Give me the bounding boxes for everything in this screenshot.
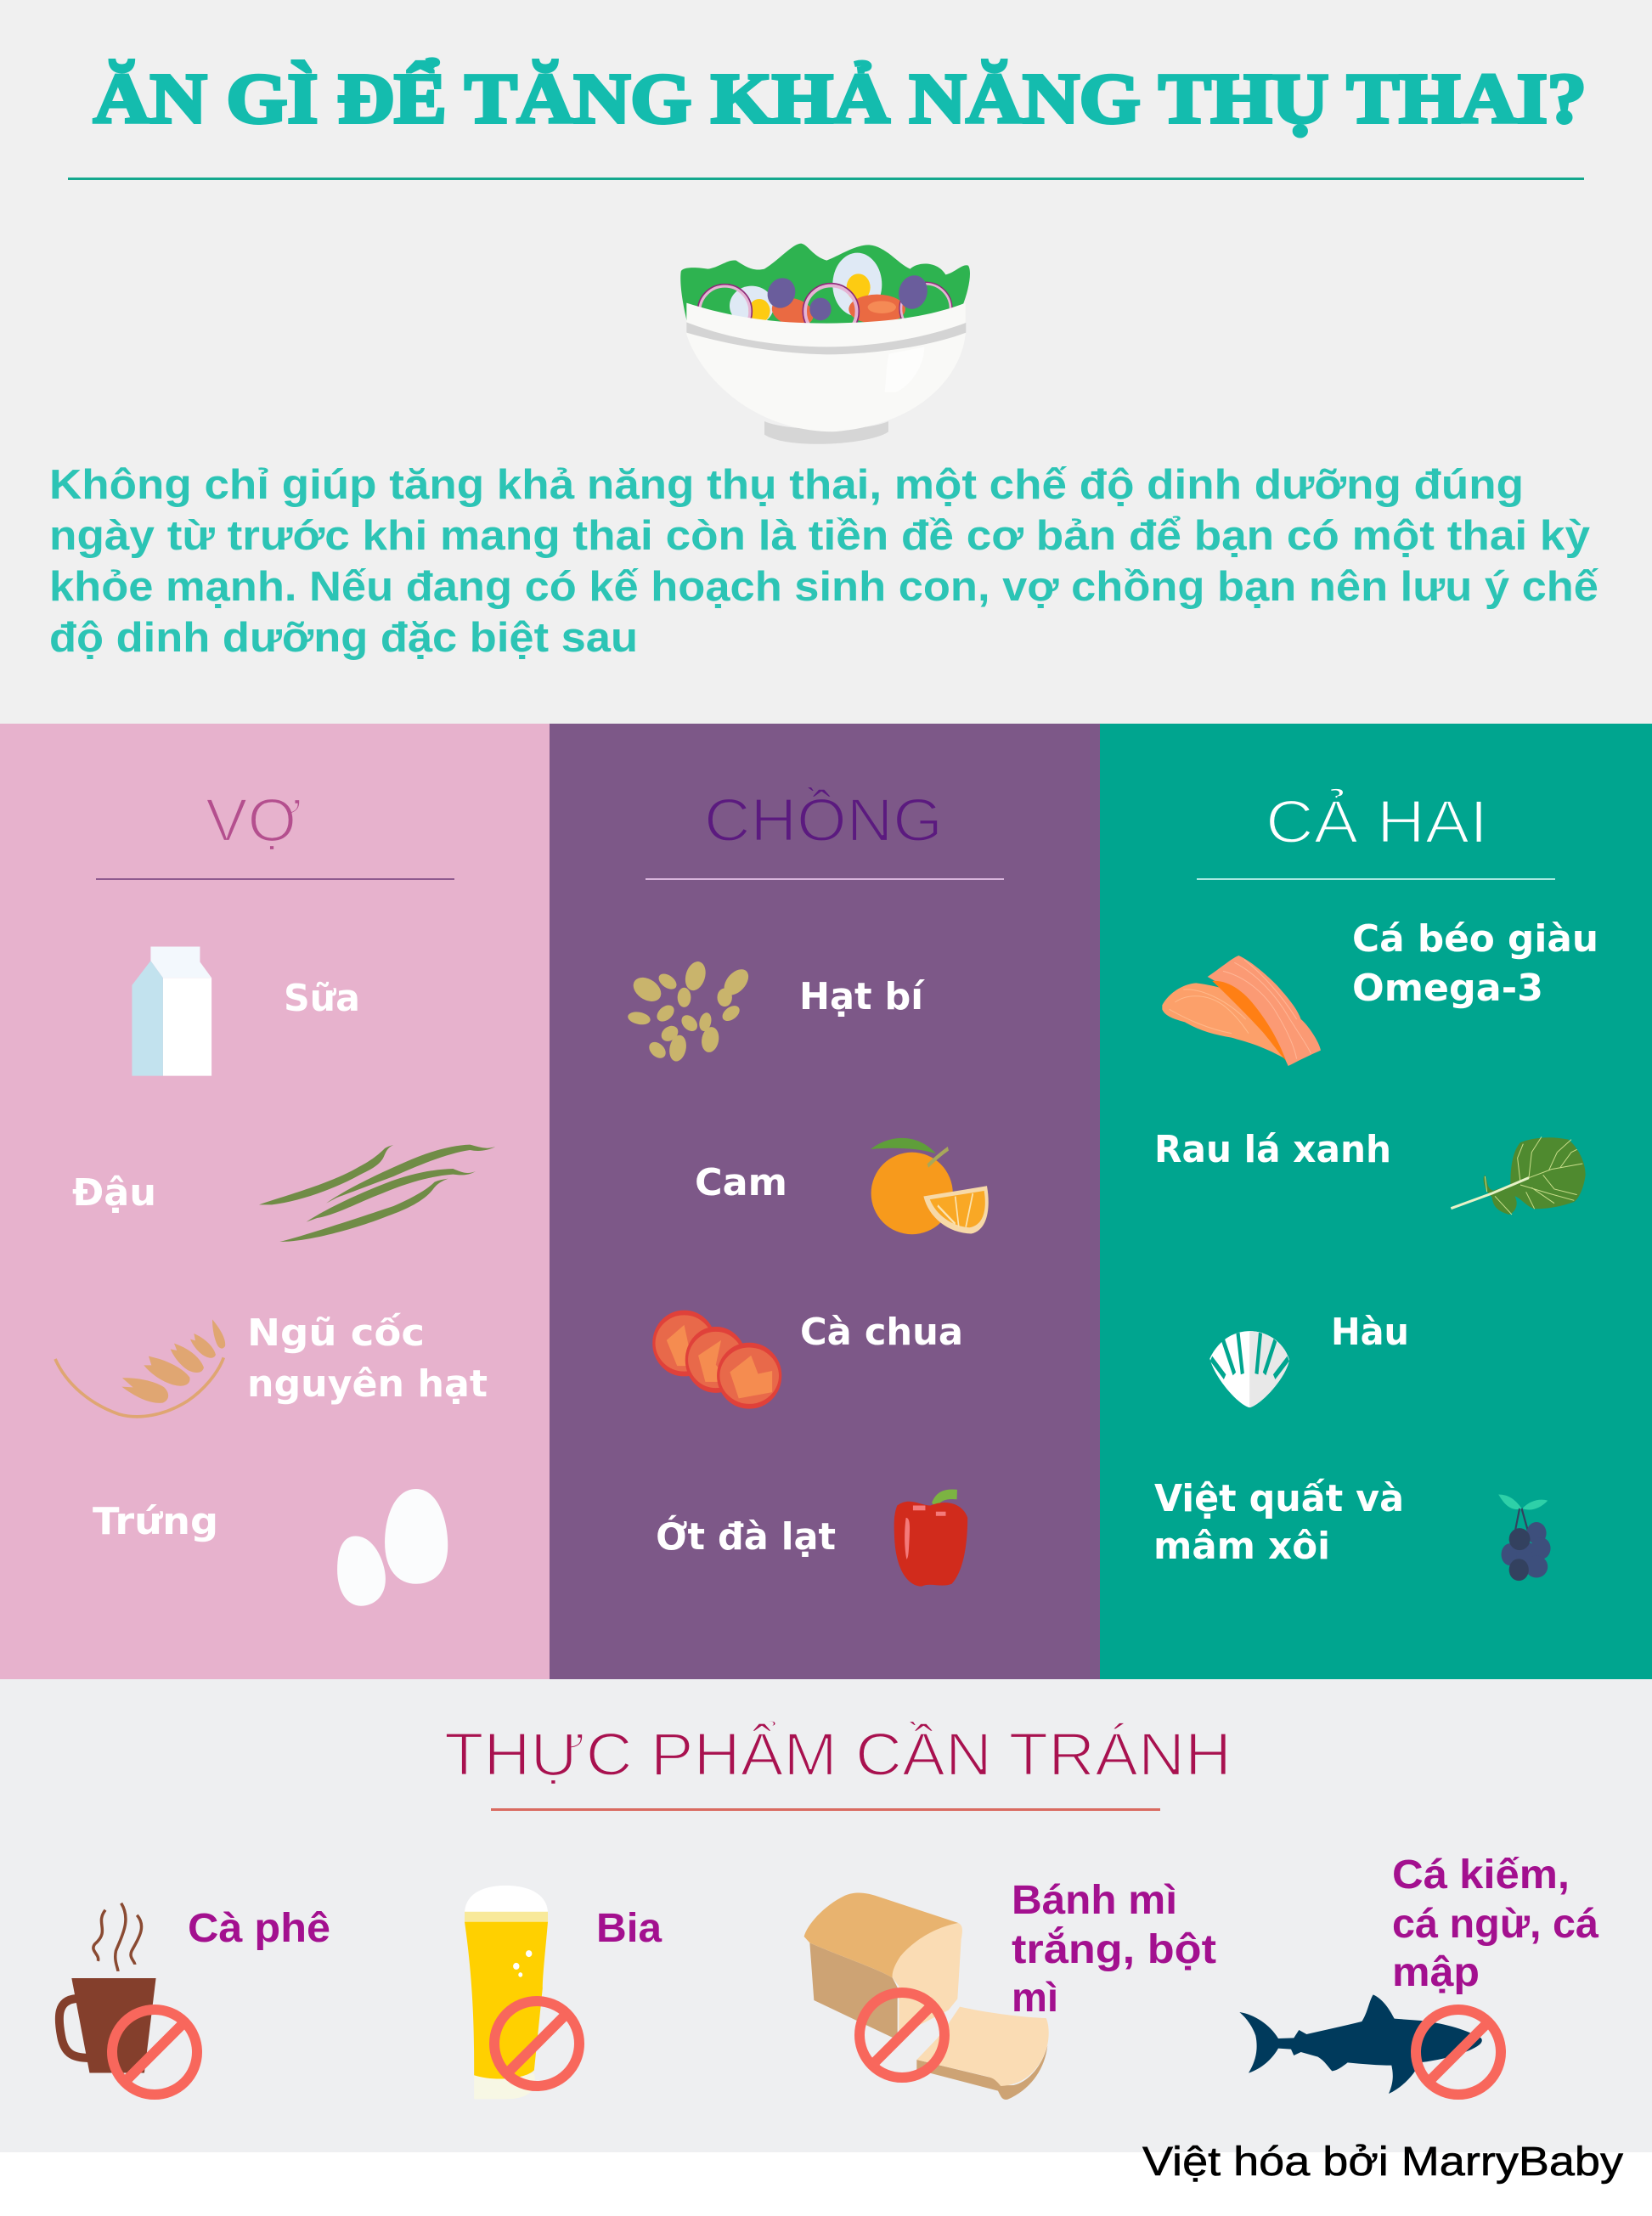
label: ớt đà lạt: Ớt đà lạt [656,1514,836,1559]
label: bia: Bia [596,1906,662,1951]
intro text: ngày từ trước khi mang thai còn là tiền đề cơ bản để bạn có một thai kỳ [49,513,1590,559]
intro text: khỏe mạnh. Nếu đang có kế hoạch sinh con, vợ chồng bạn nên lưu ý chế [49,564,1599,610]
panel: foods to avoid [0,1679,1652,2152]
label: ngũ cốc nguyên hạt: Ngũ cốc [247,1311,425,1355]
label: bánh mì trắng, bột mì: Bánh mì [1012,1878,1177,1923]
label: hạt bí: Hạt bí [799,975,926,1018]
label: cá béo giàu omega-3: Cá béo giàu [1352,917,1598,961]
heading: chồng: CHỒNG [704,787,943,854]
label: cam: Cam [695,1161,787,1204]
intro text: Không chỉ giúp tăng khả năng thụ thai, một chế độ dinh dưỡng đúng [49,462,1524,508]
icon: green beans [259,1145,495,1242]
icon: salad bowl [680,244,970,444]
label: ngũ cốc nguyên hạt: nguyên hạt [247,1362,488,1406]
label: cà chua: Cà chua [800,1311,963,1354]
label: cá kiếm, cá ngừ, cá mập [1392,1852,1598,1995]
heading: thực phẩm cần tránh: THỰC PHẨM CẦN TRÁNH [444,1721,1232,1789]
intro text: độ dinh dưỡng đặc biệt sau [49,615,638,661]
label: sữa: Sữa [284,977,360,1020]
icon: orange [871,1138,989,1234]
label: cá kiếm, cá ngừ, cá mập: Cá kiếm, [1392,1852,1570,1897]
label: hàu: Hàu [1331,1311,1409,1354]
icon: leafy greens [1451,1136,1586,1215]
icon: pumpkin seeds [628,956,750,1067]
panel: vợ [0,724,550,1679]
intro text [49,462,1599,661]
credit: Việt hóa bởi MarryBaby [1142,2140,1623,2185]
icon: salmon fillets [1162,956,1321,1066]
icon: bread loaf [804,1893,1049,2100]
label: bánh mì trắng, bột mì [1012,1878,1216,2021]
panel: chồng [550,724,1100,1679]
icon: wheat [55,1319,225,1417]
title: ĂN GÌ ĐỂ TĂNG KHẢ NĂNG THỤ THAI? [93,58,1587,138]
label: trứng: Trứng [93,1500,218,1543]
panel: cả hai [1100,724,1652,1679]
heading: vợ: VỢ [206,787,302,854]
icon: eggs [337,1489,448,1606]
icon: coffee mug [59,1903,197,2095]
icon: blueberries [1498,1495,1551,1581]
label: ngũ cốc nguyên hạt [247,1311,488,1406]
icon: bell pepper [894,1494,967,1587]
label: cá kiếm, cá ngừ, cá mập: mập [1392,1950,1480,1995]
label: việt quất và mâm xôi: mâm xôi [1153,1525,1330,1568]
label: bánh mì trắng, bột mì: mì [1012,1976,1058,2021]
heading: cả hai: CẢ HAI [1266,789,1488,856]
label: việt quất và mâm xôi: Việt quất và [1154,1477,1404,1520]
label: cà phê: Cà phê [188,1906,330,1951]
icon: oyster shell [1209,1331,1289,1407]
icon: shark [1239,1994,1501,2095]
label: đậu: Đậu [72,1171,156,1215]
label: cá béo giàu omega-3: Omega-3 [1352,967,1543,1010]
label: cá béo giàu omega-3 [1352,917,1598,1010]
label: bánh mì trắng, bột mì: trắng, bột [1012,1926,1216,1972]
label: cá kiếm, cá ngừ, cá mập: cá ngừ, cá [1392,1902,1598,1947]
icon: tomato slices [654,1312,781,1407]
label: rau lá xanh: Rau lá xanh [1154,1128,1391,1171]
icon: beer glass [465,1886,579,2099]
icon: milk carton [132,946,211,1076]
label: việt quất và mâm xôi [1153,1477,1404,1568]
